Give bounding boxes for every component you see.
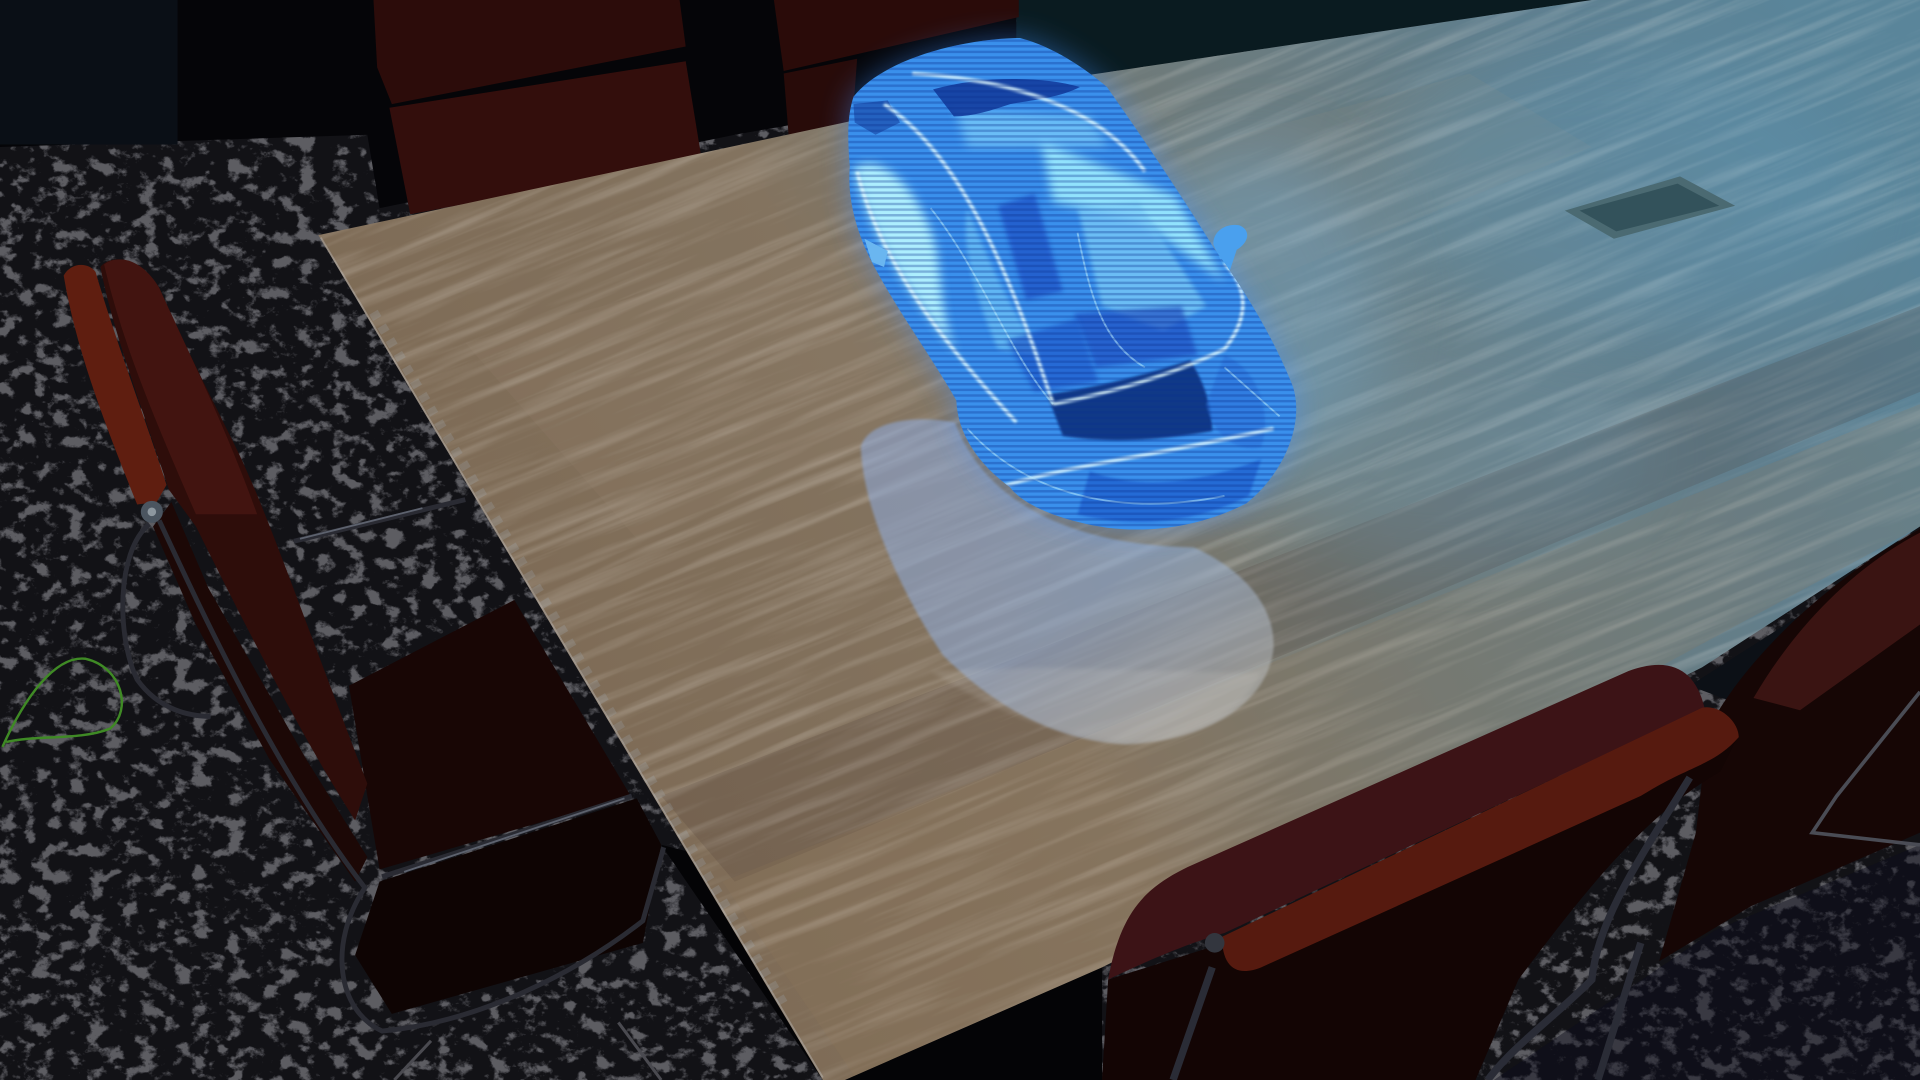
wire lines [857, 73, 1273, 490]
table power outlet [1565, 176, 1735, 239]
table blue light [1380, 63, 1832, 334]
dark patches [933, 79, 1080, 116]
main chair top cushion [1108, 665, 1704, 980]
hologram reflection on table [861, 419, 1274, 744]
car wing mirror [1213, 225, 1247, 272]
scanlines [833, 31, 1310, 539]
rear chair back [1659, 529, 1920, 961]
hologram car [833, 31, 1310, 539]
chair lower spine [153, 502, 367, 882]
car left mirror bump [864, 239, 888, 267]
main chair arm bar [1222, 707, 1739, 971]
chair back cushion [100, 259, 367, 820]
table left edge highlight [321, 238, 823, 1078]
car body [848, 38, 1296, 530]
wood plank shading [661, 306, 1920, 882]
front-right chairs [1102, 529, 1920, 1080]
chair metal frame [123, 500, 664, 1031]
chair arm bar [64, 265, 167, 504]
bright highlights [850, 158, 958, 350]
back chairs [373, 0, 1019, 214]
chair seat [349, 600, 631, 869]
car wireframe details [833, 31, 1310, 539]
green cable [2, 659, 122, 747]
car outer glow [848, 38, 1296, 530]
main chair body [1102, 735, 1739, 1080]
chair arm frame [1173, 778, 1690, 1080]
left chair [64, 259, 664, 1080]
